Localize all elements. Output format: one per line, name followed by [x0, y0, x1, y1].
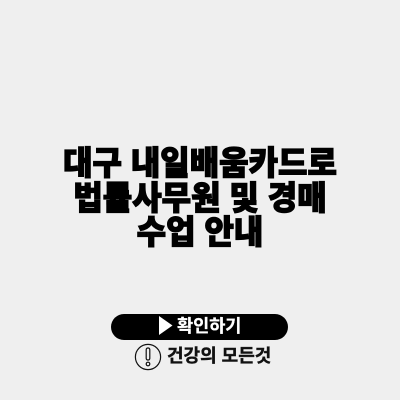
button: confirm [111, 314, 288, 340]
title [63, 144, 337, 251]
title: 수업 안내 [137, 213, 263, 251]
title: 법률사무원 및 경매 [73, 179, 327, 217]
button: confirm: 확인하기 [177, 316, 241, 336]
icon: exclamation circle [134, 344, 162, 370]
brand label: 건강의 모든것 [167, 346, 271, 366]
title: 대구 내일배움카드로 [63, 144, 337, 182]
